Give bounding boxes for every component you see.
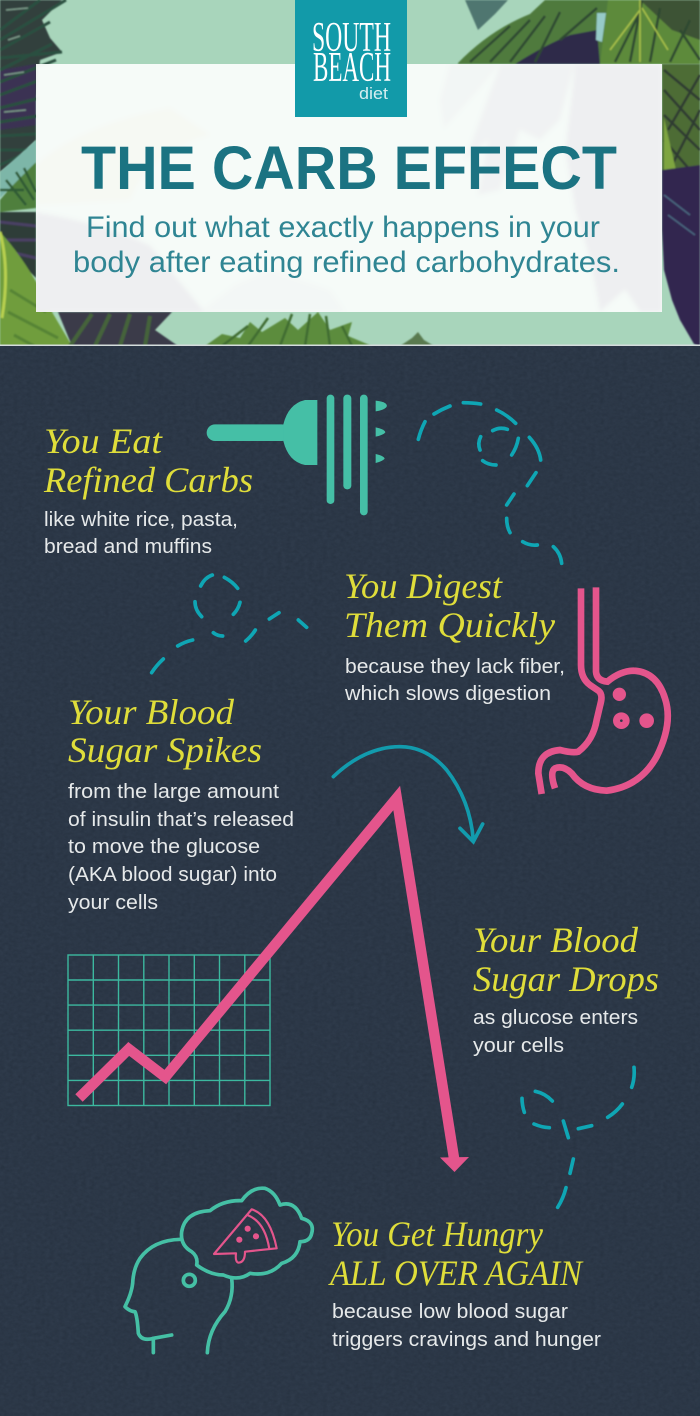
logo: South Beach Diet <box>295 0 407 117</box>
step 3 text: Your Blood Sugar Spikes: to move the glucose <box>68 836 260 858</box>
step 2 text: You Digest Them Quickly: You Digest <box>344 566 503 606</box>
step 5 text: You Get Hungry All Over Again: ALL OVER AGAIN <box>328 1253 584 1293</box>
icon: fork with pasta strands <box>207 395 387 515</box>
dashed path: drop to hunger <box>522 1067 634 1207</box>
palm: left dark crown <box>0 0 66 172</box>
step 5 text: You Get Hungry All Over Again <box>328 1214 601 1351</box>
step 4 text: Your Blood Sugar Drops: Your Blood <box>473 920 639 960</box>
header photo: palm trees against sky <box>0 0 700 346</box>
step 1 text: You Eat Refined Carbs: Refined Carbs <box>43 460 253 500</box>
palm: lower left fronds <box>0 140 178 346</box>
step 4 text: Your Blood Sugar Drops: Sugar Drops <box>473 959 659 999</box>
dashed path: stomach to blood sugar <box>152 575 307 673</box>
step 2 text: You Digest Them Quickly <box>344 566 565 705</box>
subtitle: body after eating refined carbohydrates. <box>73 246 620 279</box>
step 4 text: Your Blood Sugar Drops <box>473 920 659 1057</box>
pizza slice <box>214 1209 277 1263</box>
step 3 text: Your Blood Sugar Spikes: Sugar Spikes <box>68 730 262 770</box>
step 3 text: Your Blood Sugar Spikes: of insulin that’s released <box>68 809 294 831</box>
logo: South Beach Diet: SOUTH <box>312 15 391 61</box>
slate background <box>0 344 700 1416</box>
step 1 text: You Eat Refined Carbs: like white rice, pasta, <box>44 509 238 531</box>
subtitle <box>73 211 620 279</box>
chart: grid <box>68 955 270 1106</box>
palm: upper right crown <box>458 0 700 64</box>
step 3 text: Your Blood Sugar Spikes: (AKA blood sugar) into <box>68 864 277 886</box>
step 4 text: Your Blood Sugar Drops: your cells <box>473 1035 564 1057</box>
step 2 text: You Digest Them Quickly: because they lack fiber, <box>345 656 565 678</box>
step 1 text: You Eat Refined Carbs <box>43 421 253 558</box>
subtitle: Find out what exactly happens in your <box>86 211 600 244</box>
icon: head thinking of pizza <box>125 1188 312 1353</box>
head outline <box>125 1188 312 1353</box>
title: THE CARB EFFECT <box>81 134 617 202</box>
title panel <box>36 64 662 312</box>
step 1 text: You Eat Refined Carbs: You Eat <box>44 421 163 461</box>
step 5 text: You Get Hungry All Over Again: triggers cravings and hunger <box>332 1329 601 1351</box>
arrow: curved teal arrow over peak <box>333 747 483 842</box>
step 5 text: You Get Hungry All Over Again: because low blood sugar <box>332 1301 568 1323</box>
dashed path: fork to stomach <box>418 403 562 563</box>
step 2 text: You Digest Them Quickly: Them Quickly <box>344 605 555 645</box>
icon: stomach <box>538 587 668 794</box>
step 2 text: You Digest Them Quickly: which slows digestion <box>344 683 551 705</box>
step 1 text: You Eat Refined Carbs: bread and muffins <box>44 536 212 558</box>
logo: South Beach Diet: diet <box>359 84 388 103</box>
palm: small crown bottom centre <box>205 312 434 346</box>
step 3 text: Your Blood Sugar Spikes <box>68 692 294 914</box>
step 3 text: Your Blood Sugar Spikes: from the large amount <box>68 781 279 803</box>
chart: blood sugar spike and drop line <box>79 798 469 1172</box>
step 3 text: Your Blood Sugar Spikes: Your Blood <box>68 692 235 732</box>
step 4 text: Your Blood Sugar Drops: as glucose enters <box>473 1007 638 1029</box>
palm: right side fronds <box>662 64 700 346</box>
step 3 text: Your Blood Sugar Spikes: your cells <box>68 892 158 914</box>
palm: faint fronds behind panel <box>36 64 662 312</box>
step 5 text: You Get Hungry All Over Again: You Get Hungry <box>331 1214 543 1254</box>
logo: South Beach Diet: BEACH <box>313 45 391 91</box>
